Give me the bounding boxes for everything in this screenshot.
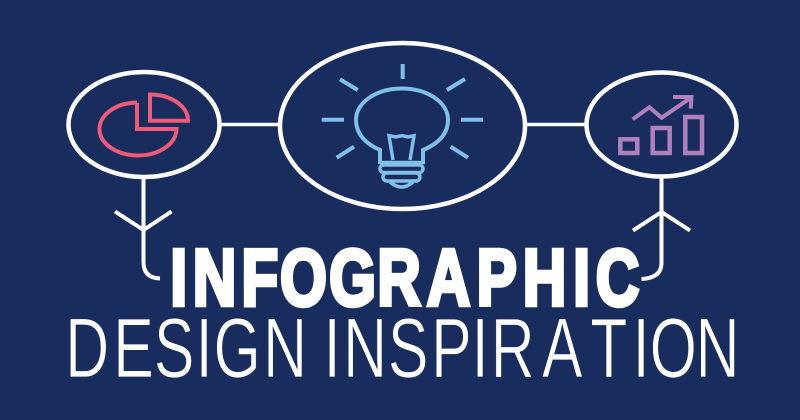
filament [389,136,414,160]
circle: light bulb node [280,43,525,209]
title: INFOGRAPHIC: INFOGRAPHIC [170,233,639,322]
bulb base [380,165,423,172]
circle: pie chart node [68,72,220,177]
rays [322,64,483,158]
circle: chart node [586,72,736,176]
subtitle: DESIGN INSPIRATION: DESIGN INSPIRATION [65,301,739,395]
arrow: title up to right circle [633,177,690,279]
icon: pie chart [99,94,188,155]
icon: light bulb [322,64,483,187]
bulb glass [356,88,448,162]
connector: center circle to right circle [526,123,586,126]
arrow: left circle down to title [115,178,172,278]
connector: left circle to center circle [220,123,280,126]
icon: bar chart with rising arrow [620,97,702,153]
